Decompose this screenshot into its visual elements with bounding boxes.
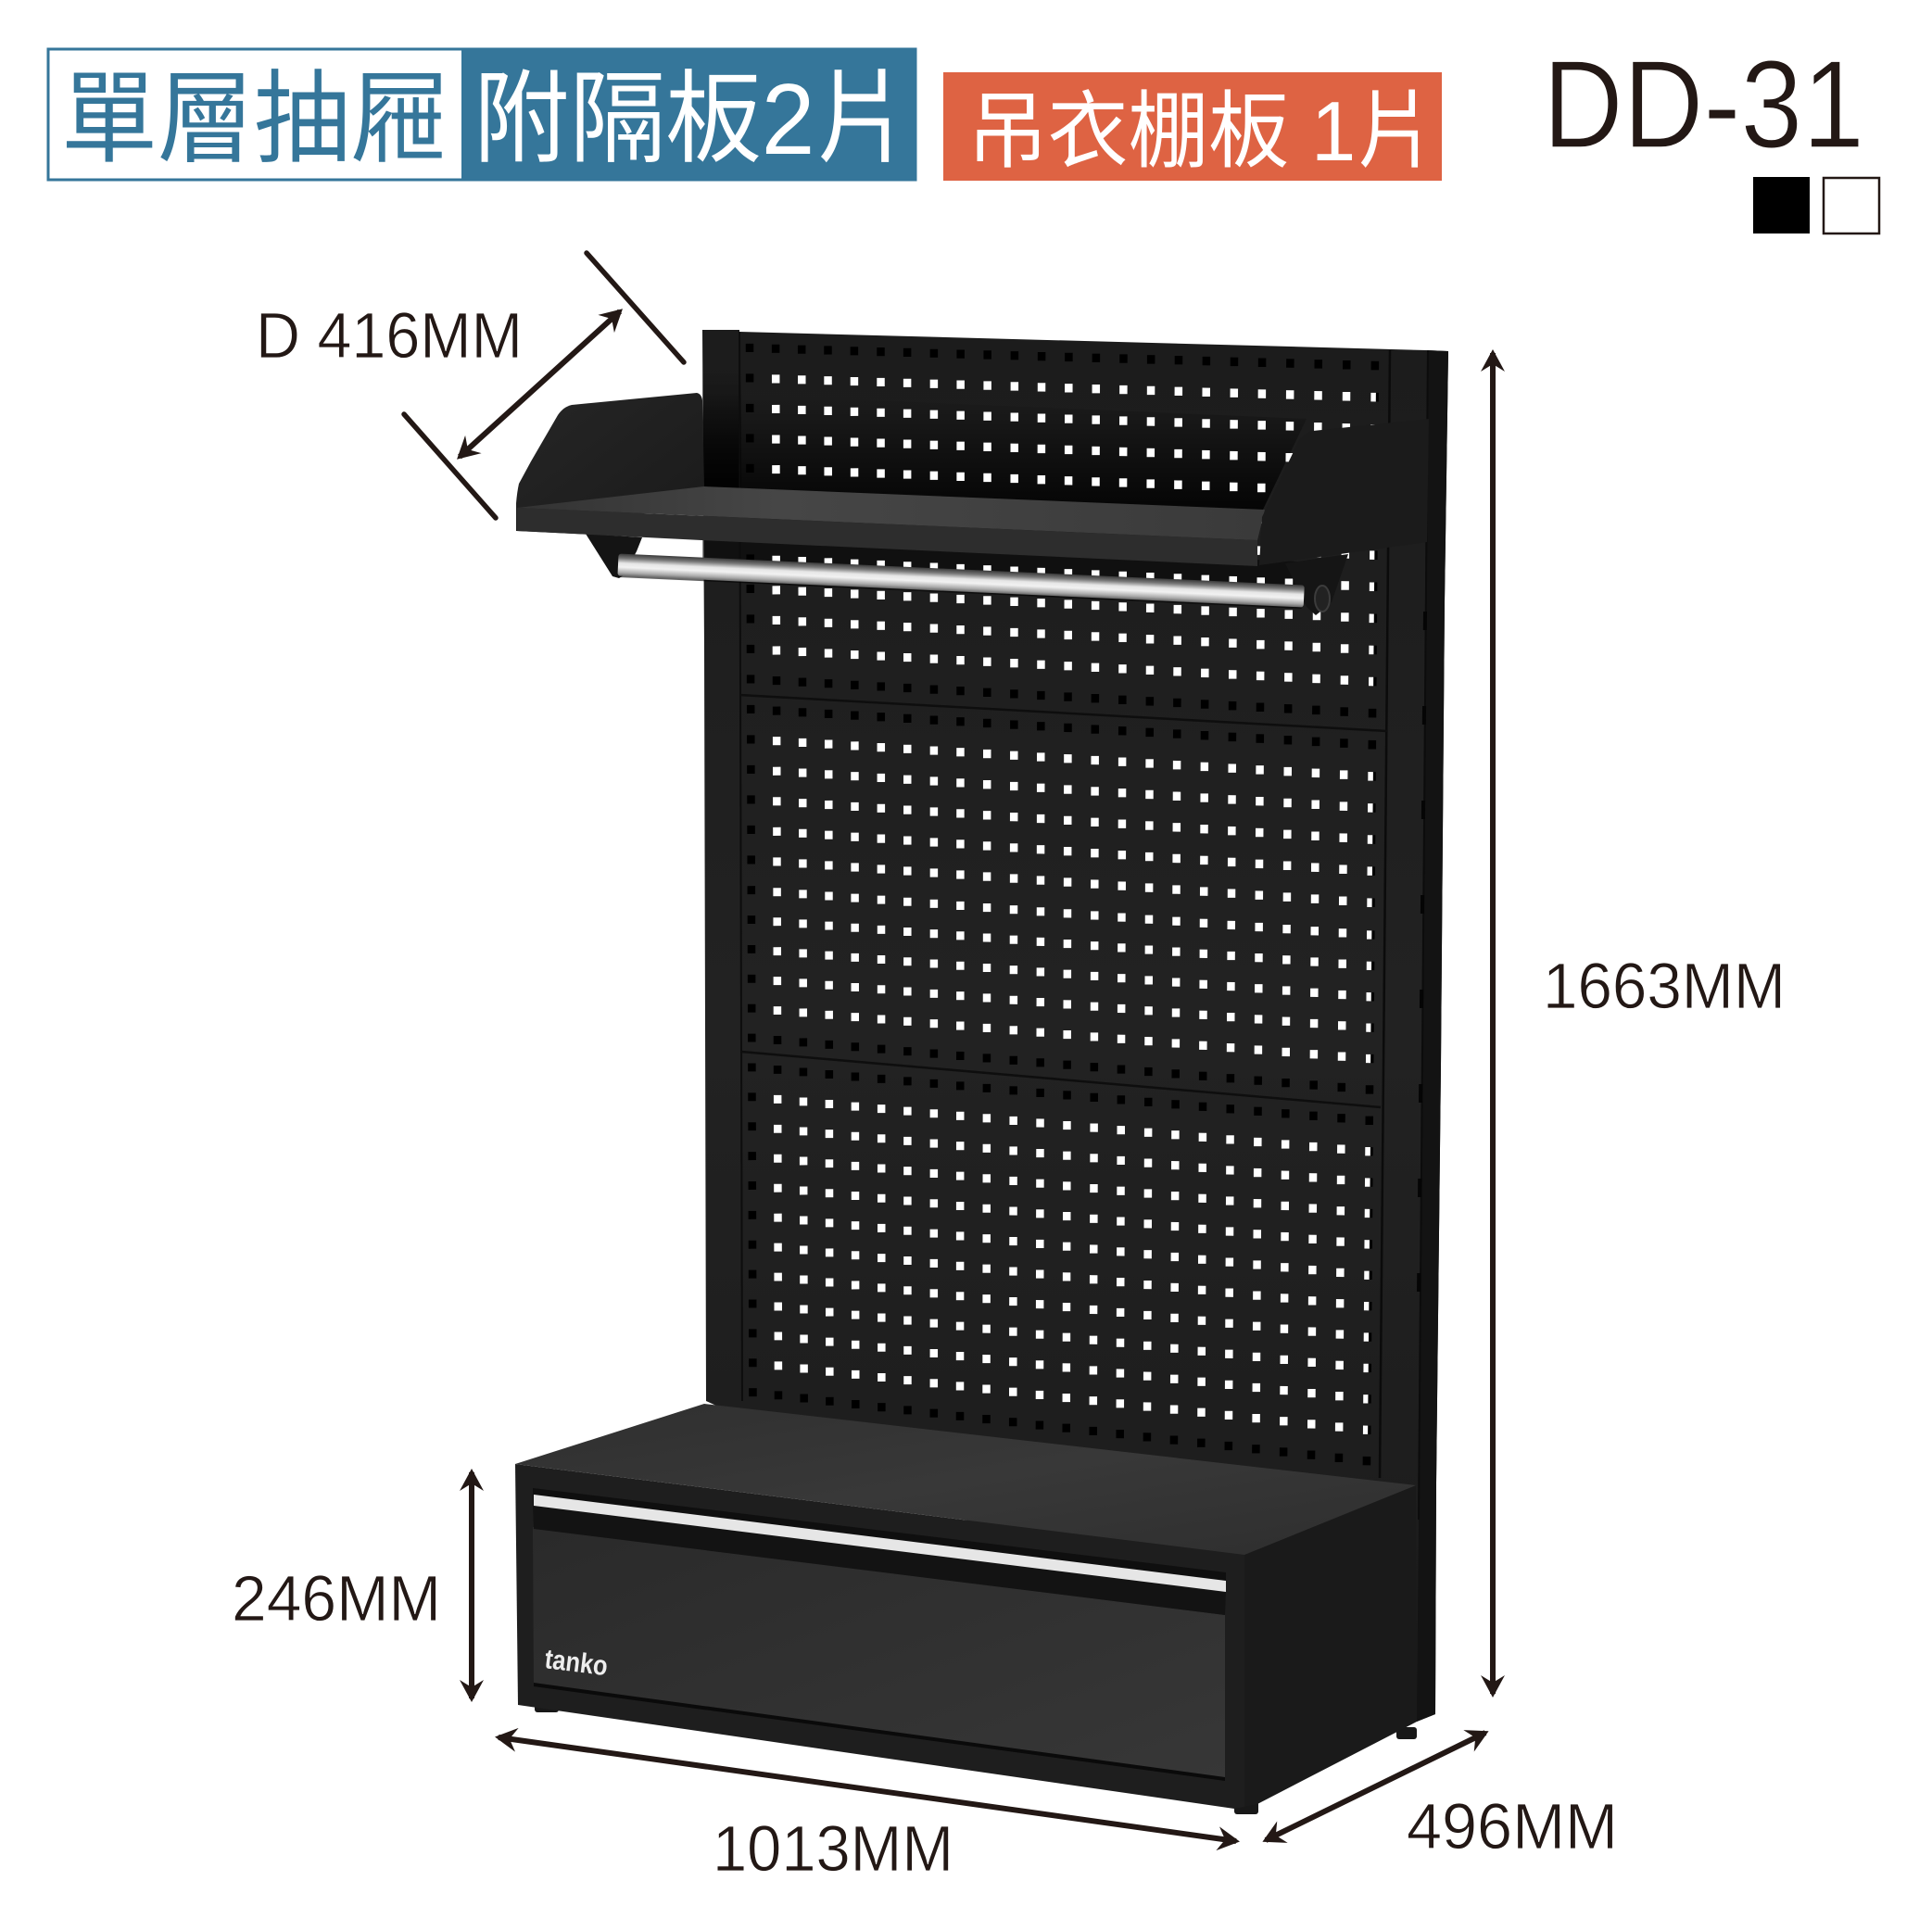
dimension: width <box>499 1737 1236 1885</box>
heading: orange hanging shelf tag: 吊衣棚板 1片 <box>967 85 1436 179</box>
cabinet side <box>1244 1485 1417 1807</box>
cabinet feet <box>535 1701 1417 1814</box>
heading: blue title tag <box>48 48 915 181</box>
dimension: width: 1013MM <box>713 1812 953 1885</box>
shelf front edge <box>517 508 1257 566</box>
pegboard panel <box>702 330 1448 1722</box>
drawer handle <box>534 1495 1226 1592</box>
drawer dark band <box>533 1506 1226 1615</box>
colour swatches <box>1753 177 1879 233</box>
drawer recess <box>533 1488 1226 1591</box>
shelf top surface <box>517 486 1265 540</box>
heading: blue title tag: 單層抽屜 <box>61 63 447 176</box>
brand mark: tanko <box>543 1644 610 1682</box>
dimension: depth <box>256 253 684 518</box>
cabinet front frame <box>515 1464 1244 1809</box>
shelf right wall <box>1259 419 1429 565</box>
dimension: cabinet depth <box>1266 1733 1618 1862</box>
dimension: cabinet height: 246MM <box>232 1562 441 1634</box>
dimension: depth: D 416MM <box>256 299 523 372</box>
heading: blue title tag: 附隔板2片 <box>474 63 911 176</box>
drawer shadow line <box>534 1683 1225 1781</box>
dimension: height: 1663MM <box>1543 950 1786 1022</box>
drawer face <box>533 1527 1225 1779</box>
hanging rod bracket right <box>1285 554 1348 615</box>
product: pegboard gondola with drawer <box>515 330 1448 1814</box>
shelf <box>516 393 1429 566</box>
dimension: cabinet depth: 496MM <box>1407 1790 1618 1862</box>
base cabinet <box>515 1404 1417 1814</box>
cabinet top <box>515 1404 1416 1555</box>
hanging rod <box>617 554 1305 609</box>
hanging rod bracket left <box>586 534 642 578</box>
shelf left wall <box>516 393 704 535</box>
model number: DD-31 <box>1543 34 1864 174</box>
